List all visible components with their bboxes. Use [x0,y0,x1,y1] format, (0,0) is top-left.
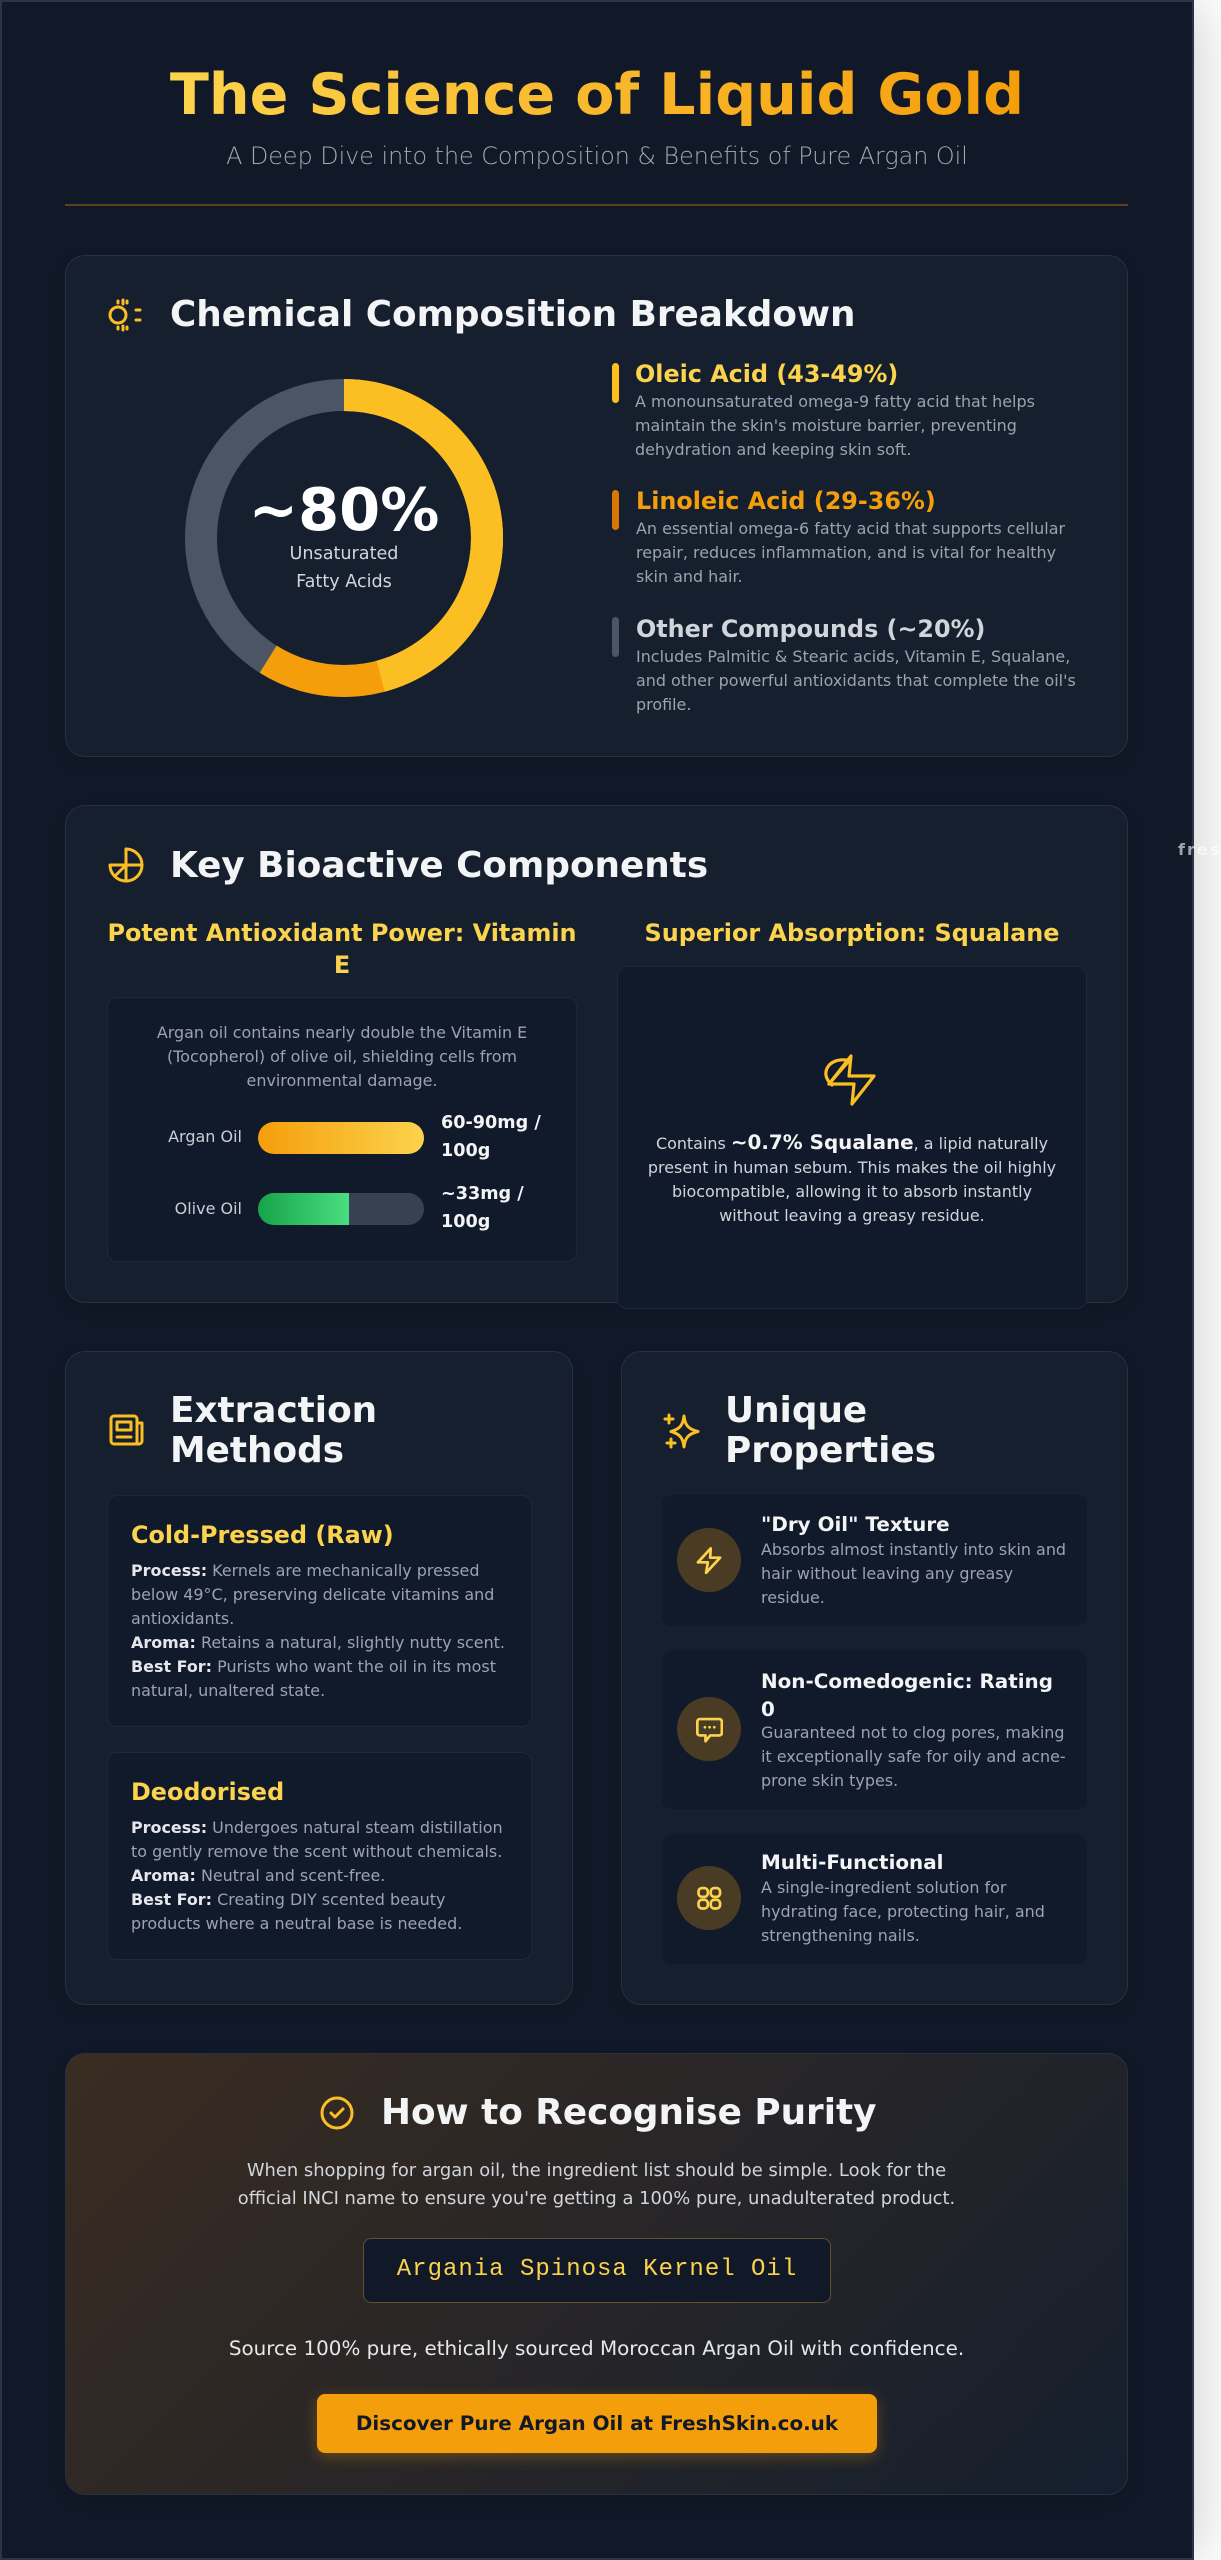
method: cold-pressed: Process: Kernels are mechanically pressed [131,1561,479,1580]
property: non-comedogenic: 0 [761,1698,775,1720]
method: deodorised: to gently remove the scent without chemicals. [131,1842,502,1861]
legend item: oleic acid [612,360,1035,459]
method: deodorised: Deodorised [131,1778,284,1806]
property: multi-functional: Multi-Functional [761,1851,943,1874]
donut centre value: ~80% [249,475,439,544]
text: squalane description: present in human sebum. This makes the oil highly [648,1158,1056,1177]
icon: sparkles [664,1414,700,1448]
INCI name box: Argania Spinosa Kernel Oil [397,2256,797,2283]
panel: unique properties [621,1351,1128,2005]
text: source statement: Source 100% pure, ethically sourced Moroccan Argan Oil with confidence. [229,2337,964,2360]
text: vitamin E description: (Tocopherol) of olive oil, shielding cells from [167,1047,517,1066]
heading: chemical composition: Chemical Composition Breakdown [170,294,856,335]
property: non-comedogenic: it exceptionally safe for oily and acne- [761,1747,1066,1766]
subheading: vitamin E: E [334,951,350,979]
legend item: linoleic acid: skin and hair. [636,567,743,586]
method: cold-pressed [107,1495,532,1727]
method: cold-pressed: below 49°C, preserving delicate vitamins and [131,1585,494,1604]
subtitle: A Deep Dive into the Composition & Benefits of Pure Argan Oil [226,142,968,170]
property: multi-functional: strengthening nails. [761,1926,920,1945]
text: purity intro [238,2160,955,2209]
bar: argan oil: 100g [441,1140,490,1160]
bar: olive oil: ~33mg / [441,1184,524,1204]
text: vitamin E description: Argan oil contains nearly double the Vitamin E [157,1023,527,1042]
text: squalane description: biocompatible, allowing it to absorb instantly [672,1182,1032,1201]
method: cold-pressed: natural, unaltered state. [131,1681,325,1700]
heading: purity: How to Recognise Purity [381,2092,876,2133]
legend item: linoleic acid: Linoleic Acid (29-36%) [636,487,936,515]
text: vitamin E description: environmental damage. [247,1071,437,1090]
icon: bolt [824,1054,876,1106]
icon: atom [108,298,142,332]
method: cold-pressed: Best For: Purists who want the oil in its most [131,1657,496,1676]
bar: argan oil [168,1113,541,1160]
property: multi-functional: A single-ingredient solution for [761,1878,1006,1897]
method: deodorised: Process: Undergoes natural steam distillation [131,1818,503,1837]
bar: argan oil: 60-90mg / [441,1113,541,1133]
panel: chemical composition [65,255,1128,757]
panel: how to recognise purity [65,2053,1128,2495]
text: purity intro: official INCI name to ensure you're getting a 100% pure, unadulterated product. [238,2188,955,2209]
bar: olive oil [175,1184,524,1232]
method: cold-pressed: antioxidants. [131,1609,234,1628]
heading: extraction methods: Methods [170,1430,344,1471]
property: dry oil texture: "Dry Oil" Texture [761,1513,950,1536]
method: cold-pressed: Aroma: Retains a natural, slightly nutty scent. [131,1633,505,1652]
legend item: oleic acid: A monounsaturated omega-9 fatty acid that helps [635,392,1035,411]
property: non-comedogenic: Non-Comedogenic: Rating [761,1670,1053,1693]
title: The Science of Liquid Gold [170,62,1024,128]
legend item: other compounds: Includes Palmitic & Stearic acids, Vitamin E, Squalane, [636,647,1070,666]
INCI name box [363,2238,831,2303]
legend item: other compounds: and other powerful antioxidants that complete the oil's [636,671,1076,690]
heading: extraction methods: Extraction [170,1390,377,1431]
legend item: oleic acid: maintain the skin's moisture barrier, preventing [635,416,1017,435]
method: deodorised: Best For: Creating DIY scented beauty [131,1890,445,1909]
text: vitamin E description [157,1023,527,1090]
bar: argan oil: Argan Oil [168,1127,242,1146]
donut chart [185,379,503,697]
bar: olive oil: Olive Oil [175,1199,242,1218]
property: dry oil texture: Absorbs almost instantly into skin and [761,1540,1066,1559]
method: deodorised: products where a neutral base is needed. [131,1914,462,1933]
property: dry oil texture: hair without leaving any greasy [761,1564,1013,1583]
donut centre label [290,544,398,592]
subheading: vitamin E: Potent Antioxidant Power: Vitamin [107,919,577,947]
text: squalane description: without leaving a greasy residue. [719,1206,985,1225]
text: squalane description [648,1131,1056,1225]
subheading: vitamin E [107,919,577,979]
property: dry oil texture: residue. [761,1588,825,1607]
heading: bioactive components: Key Bioactive Components [170,845,708,886]
legend item: oleic acid: Oleic Acid (43-49%) [635,360,898,388]
panel: extraction methods [65,1351,573,2005]
property: dry oil texture [662,1495,1087,1626]
heading: unique properties: Properties [725,1430,936,1471]
property: non-comedogenic [662,1650,1087,1809]
method: deodorised [107,1752,532,1960]
legend item: oleic acid: dehydration and keeping skin soft. [635,440,911,459]
icon: check circle [320,2096,354,2130]
legend item: other compounds: profile. [636,695,691,714]
button: Discover Pure Argan Oil at FreshSkin.co.uk [356,2412,838,2435]
method: deodorised: Aroma: Neutral and scent-free. [131,1866,385,1885]
icon: pie chart [108,848,144,882]
subheading: squalane: Superior Absorption: Squalane [644,919,1059,947]
button [317,2394,877,2453]
property: non-comedogenic: prone skin types. [761,1771,898,1790]
panel: vitamin E comparison [107,997,577,1262]
heading: unique properties [725,1390,936,1471]
method: cold-pressed: Cold-Pressed (Raw) [131,1521,394,1549]
bar: olive oil: 100g [441,1212,490,1232]
legend item: linoleic acid: An essential omega-6 fatty acid that supports cellular [636,519,1065,538]
donut centre label: Unsaturated [290,544,398,564]
heading: unique properties: Unique [725,1390,867,1431]
legend item: linoleic acid [612,487,1066,586]
heading: extraction methods [170,1390,377,1471]
icon: newspaper [110,1414,144,1446]
text: purity intro: When shopping for argan oil, the ingredient list should be simple. Look for the [247,2160,946,2181]
donut centre label: Fatty Acids [296,572,392,592]
panel: bioactive components [65,805,1128,1303]
legend item: linoleic acid: repair, reduces inflammation, and is vital for healthy [636,543,1056,562]
panel: squalane [617,966,1087,1309]
text: squalane description: Contains ~0.7% Squalane, a lipid naturally [656,1131,1048,1154]
property: multi-functional [662,1834,1087,1964]
legend item: other compounds [612,615,1076,714]
property: non-comedogenic: Guaranteed not to clog pores, making [761,1723,1065,1742]
property: multi-functional: hydrating face, protecting hair, and [761,1902,1045,1921]
legend item: other compounds: Other Compounds (~20%) [636,615,985,643]
